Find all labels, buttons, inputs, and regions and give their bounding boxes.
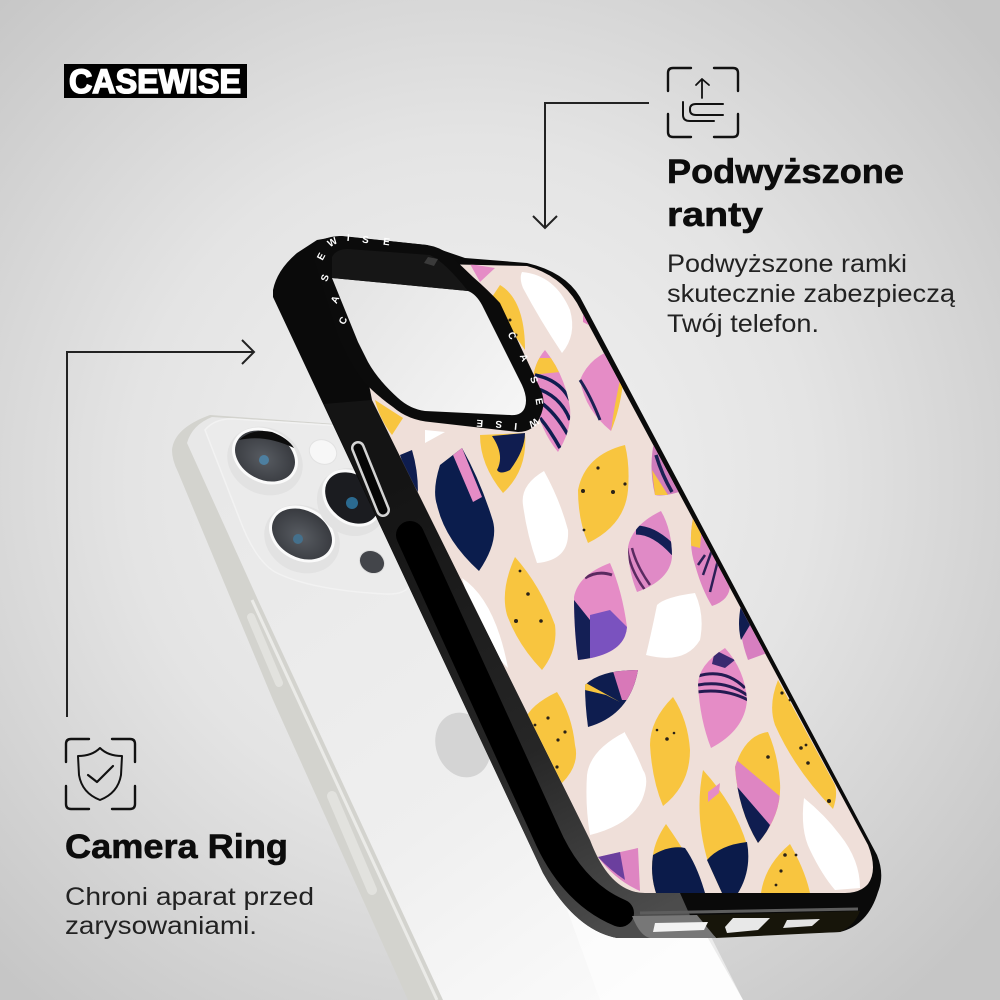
silver phone (172, 414, 743, 1000)
phone side band (172, 415, 743, 1000)
ring outer (314, 236, 544, 432)
arrow: to camera ring (67, 340, 254, 717)
port 3 (783, 919, 820, 928)
ring inner wall (332, 249, 468, 291)
heading: Podwyzszone ranty: ranty (667, 196, 763, 234)
ring brand text: E (315, 251, 328, 262)
text: camera ring description: zarysowaniami. (65, 912, 257, 940)
text: raised edges description: skutecznie zabezpieczą (667, 280, 955, 308)
bottom rim highlight (640, 909, 858, 913)
volume button (358, 448, 383, 510)
side slot (410, 535, 620, 913)
panel base (345, 262, 873, 893)
flash (305, 435, 341, 469)
lens 2 (252, 492, 352, 586)
ring opening (332, 278, 526, 415)
ring brand text: A (517, 352, 530, 364)
side button (251, 617, 279, 683)
camera plateau (205, 419, 410, 594)
ring brand text: E (382, 237, 391, 248)
ring wall highlight (424, 257, 438, 266)
microphone (355, 546, 389, 578)
text: raised edges description: Twój telefon. (667, 310, 819, 338)
patterned back panel (345, 262, 873, 893)
translucent lower band (324, 400, 700, 938)
apple logo (426, 705, 500, 785)
ring brand text: S (527, 375, 540, 386)
lens 1 (215, 414, 315, 508)
ring brand text: C (505, 330, 518, 342)
ring brand text: E (532, 397, 545, 406)
ring brand text (315, 233, 545, 431)
ring brand text: S (319, 273, 332, 283)
lens 3 (304, 454, 400, 550)
heading: Podwyzszone ranty (667, 153, 904, 234)
text: camera ring description: Chroni aparat przed (65, 883, 314, 911)
bottom olive wall (697, 911, 860, 938)
bright reflection (560, 890, 743, 1000)
heading: Podwyzszone ranty: Podwyższone (667, 153, 904, 191)
text: raised edges description (667, 250, 955, 338)
ring brand text: I (346, 233, 350, 244)
arrow: to raised edges (533, 103, 649, 228)
side band highlight (252, 600, 437, 1000)
port 1 (653, 922, 708, 932)
black phone case (273, 236, 881, 938)
port 2 (725, 918, 770, 933)
ring brand text: C (337, 315, 350, 327)
ring brand text: A (329, 294, 342, 306)
ring brand text: S (361, 235, 370, 246)
camera ring (314, 233, 545, 432)
ring brand text: W (526, 415, 540, 430)
ring brand text: W (326, 235, 340, 250)
phone back face (187, 417, 743, 1000)
text: raised edges description: Podwyższone ramki (667, 250, 907, 278)
ring brand text: S (495, 418, 503, 429)
text: camera ring description (65, 883, 314, 940)
lower side button (332, 796, 372, 890)
icon: shield (66, 739, 135, 809)
case body (273, 236, 881, 938)
icon: raised edges (668, 68, 738, 137)
bottom grey wall (632, 915, 716, 938)
ring brand text: E (476, 417, 484, 428)
heading: Camera Ring: Camera Ring (65, 828, 288, 866)
leaf pattern (375, 264, 860, 893)
ring brand text: I (514, 420, 518, 431)
logo: CASEWISE: CASEWISE (69, 63, 241, 101)
